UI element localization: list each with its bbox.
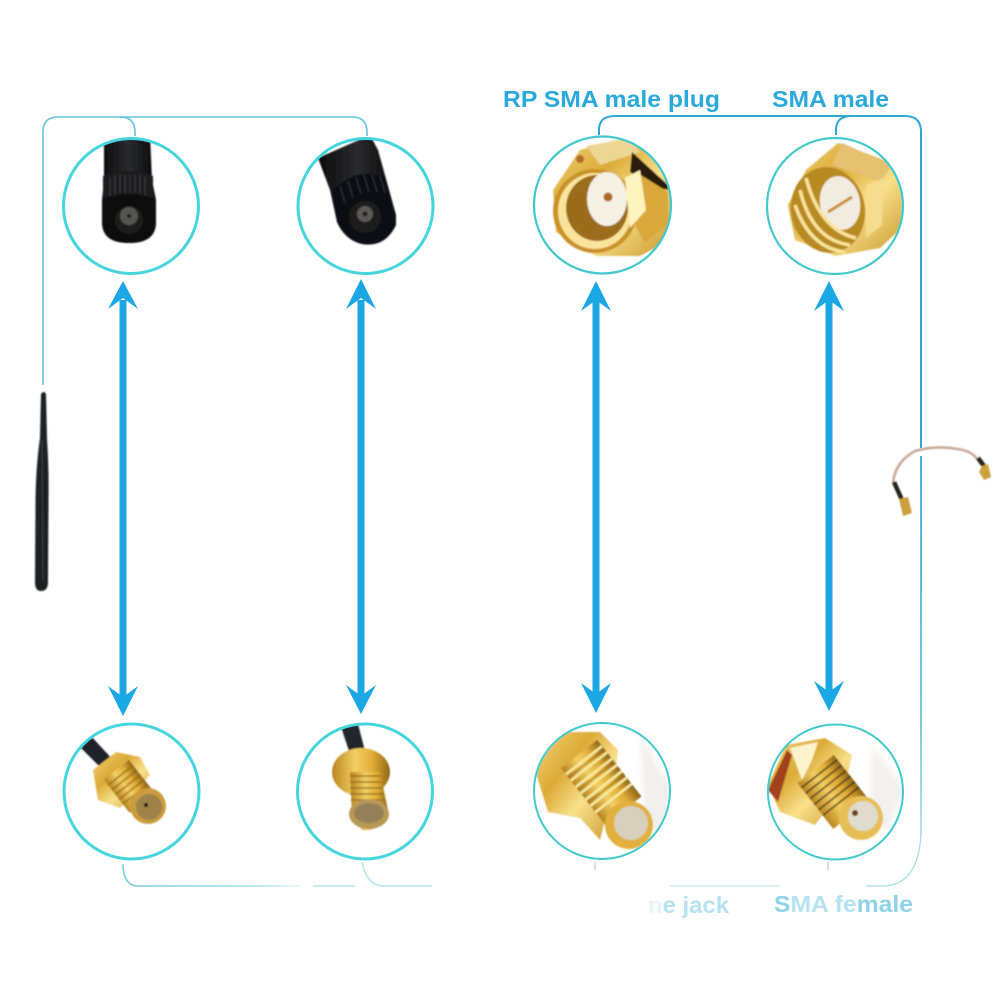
- label: faded RP SMA female jack: ne jack: [648, 892, 729, 918]
- connector lines: antenna bracket: [43, 117, 367, 385]
- arrow 4: [814, 281, 844, 711]
- circle 1: antenna RP plug: [64, 135, 198, 274]
- circle 2: antenna plug: [298, 135, 433, 274]
- circle 4: SMA male: [767, 138, 905, 274]
- circle 5: SMA female bulkhead: [64, 724, 199, 859]
- connector lines: lower bracket: [123, 862, 432, 886]
- connector lines: RP SMA and SMA male bracket: [599, 116, 921, 835]
- label: RP SMA male plug: RP SMA male plug: [503, 86, 720, 112]
- circle 6: RP SMA female bulkhead: [298, 724, 432, 859]
- icon: antenna: [35, 392, 49, 591]
- arrow 3: [581, 281, 611, 713]
- icon: cable assembly: [893, 447, 991, 516]
- circle 7: RP SMA male jack: [534, 723, 672, 859]
- label: SMA female: SMA female: [774, 891, 913, 917]
- connector lines: faded lower right: [595, 835, 921, 886]
- arrow 2: [346, 279, 376, 714]
- circle 3: RP SMA male plug: [534, 136, 674, 274]
- label: SMA male: SMA male: [772, 86, 889, 112]
- circle 8: SMA female: [768, 724, 905, 860]
- arrow 1: [108, 281, 138, 716]
